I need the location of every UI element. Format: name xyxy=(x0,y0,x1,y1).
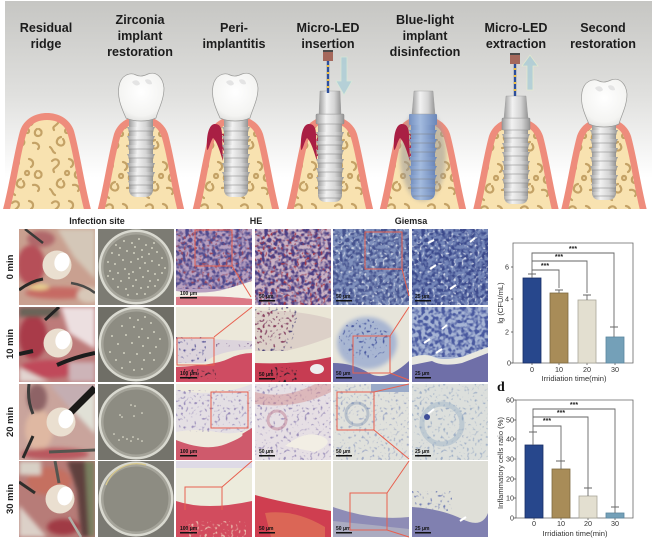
significance stars: *** xyxy=(569,246,577,253)
bar chart: inflammatory cells ratio xyxy=(496,396,633,538)
photo: 30 min culture plate xyxy=(98,461,174,537)
micrograph: Giemsa 0 min magnified: 25 μm xyxy=(415,294,430,300)
photo: 20 min infection site xyxy=(19,384,95,460)
micrograph: HE 0 min overview: 100 μm xyxy=(180,291,198,297)
significance stars: *** xyxy=(557,410,565,417)
bar chart: colony counts xyxy=(496,243,633,383)
significance stars: *** xyxy=(555,254,563,261)
micrograph: Giemsa 10 min magnified xyxy=(412,307,488,382)
step labels: implant xyxy=(118,29,163,43)
significance stars xyxy=(541,246,577,270)
step: zirconia implant restoration xyxy=(96,73,186,216)
micrograph: HE 20 min magnified xyxy=(255,384,331,460)
micrograph: Giemsa 0 min magnified xyxy=(412,229,488,305)
micrograph: Giemsa 10 min overview xyxy=(333,307,409,382)
tick labels: 30 xyxy=(611,519,619,528)
micrograph: Giemsa 10 min overview: 50 μm xyxy=(336,371,351,377)
step labels: disinfection xyxy=(390,45,460,59)
row labels: 0 min xyxy=(5,254,16,279)
photo: 0 min culture plate xyxy=(98,229,174,305)
tick labels: 0 xyxy=(507,358,511,368)
step labels: insertion xyxy=(301,37,355,51)
step labels: implantitis xyxy=(203,37,265,51)
tick labels: 30 xyxy=(611,365,619,374)
photo: 30 min infection site xyxy=(19,461,95,537)
step labels: implant xyxy=(403,29,448,43)
step: micro-LED insertion xyxy=(285,50,375,216)
step labels xyxy=(20,13,636,59)
micrograph: Giemsa 30 min overview xyxy=(333,461,409,537)
tick labels: 40 xyxy=(506,434,514,444)
step labels: Second xyxy=(580,21,626,35)
micrograph: Giemsa 10 min magnified: 25 μm xyxy=(415,371,430,377)
tick labels: 50 xyxy=(506,416,514,424)
magnification boxes and connector lines xyxy=(177,230,409,537)
y axis title: Inflammatory cells ratio (%) xyxy=(496,417,505,509)
micrograph: HE 30 min overview xyxy=(176,461,252,537)
tick labels: 10 xyxy=(557,519,565,528)
micrograph: Giemsa 20 min magnified xyxy=(412,384,488,460)
step: micro-LED extraction xyxy=(471,53,561,218)
tick labels: 30 xyxy=(506,454,514,464)
tick labels: 60 xyxy=(506,396,514,404)
micrograph: Giemsa 30 min magnified: 25 μm xyxy=(415,526,430,532)
tick labels xyxy=(505,262,619,374)
tick labels: 6 xyxy=(505,262,509,272)
arrow: extraction up xyxy=(522,55,538,90)
significance stars: *** xyxy=(541,263,549,270)
micrograph: HE 20 min overview xyxy=(176,384,252,460)
micrograph: HE 0 min overview xyxy=(176,229,252,305)
micrograph: HE 30 min magnified xyxy=(255,461,331,537)
step labels: ridge xyxy=(31,37,61,51)
micrograph: Giemsa 0 min overview xyxy=(333,229,409,305)
step labels: Peri- xyxy=(220,21,248,35)
photo: 20 min culture plate xyxy=(98,384,174,460)
arrow: insertion down xyxy=(336,57,352,95)
y axis title: lg (CFU/mL) xyxy=(496,282,505,324)
tick labels: 10 xyxy=(555,365,563,374)
micrograph: HE 20 min overview: 100 μm xyxy=(180,449,198,455)
column heading: infection site: Infection site xyxy=(69,216,125,226)
step: peri-implantitis xyxy=(191,73,281,216)
x axis title: Irridiation time(min) xyxy=(543,529,608,538)
panel letter d: d xyxy=(497,380,505,395)
row labels: 10 min xyxy=(5,329,16,359)
tick labels: 20 xyxy=(506,474,514,484)
significance stars: *** xyxy=(570,402,578,409)
tick labels: 0 xyxy=(510,514,514,522)
step: blue-light implant disinfection xyxy=(378,91,468,216)
bars xyxy=(525,445,624,518)
bars xyxy=(523,278,624,363)
micrograph: Giemsa 20 min magnified: 25 μm xyxy=(415,449,430,455)
micrograph: Giemsa 20 min overview xyxy=(333,384,409,460)
step labels: extraction xyxy=(486,37,546,51)
micrograph: Giemsa 0 min overview: 50 μm xyxy=(336,294,351,300)
panel: implant treatment schematic xyxy=(0,1,652,219)
tick labels: 20 xyxy=(584,519,592,528)
tick labels: 0 xyxy=(532,519,536,528)
tick labels: 4 xyxy=(505,294,509,304)
micrograph: HE 10 min overview xyxy=(176,307,252,382)
micrograph: HE 0 min magnified: 50 μm xyxy=(259,294,274,300)
step labels: Micro-LED xyxy=(297,21,359,35)
column heading: Giemsa: Giemsa xyxy=(395,216,428,226)
tick labels xyxy=(506,396,619,528)
column heading: HE: HE xyxy=(250,216,262,226)
x axis title: Irridiation time(min) xyxy=(542,374,607,383)
significance stars xyxy=(543,402,578,425)
error bars and brackets xyxy=(528,253,618,337)
step labels: Micro-LED xyxy=(485,21,547,35)
tick labels: 10 xyxy=(506,494,514,502)
micrograph: HE 10 min overview: 100 μm xyxy=(180,371,198,377)
error bars and brackets xyxy=(529,409,619,513)
significance stars: *** xyxy=(543,418,551,425)
micrograph: HE 0 min magnified xyxy=(255,229,331,305)
micrograph: HE 30 min magnified: 50 μm xyxy=(259,526,274,532)
photo: 10 min culture plate xyxy=(98,307,174,382)
step labels: Residual xyxy=(20,21,72,35)
tick labels: 0 xyxy=(530,365,534,374)
micrograph: Giemsa 20 min overview: 50 μm xyxy=(336,449,351,455)
row labels: 20 min xyxy=(5,407,16,437)
photo: 10 min infection site xyxy=(19,307,95,382)
step: second restoration xyxy=(559,79,649,218)
step labels: Zirconia xyxy=(116,13,165,27)
step labels: restoration xyxy=(570,37,636,51)
micrograph: HE 10 min magnified xyxy=(255,307,331,382)
micrograph: HE 20 min magnified: 50 μm xyxy=(259,449,274,455)
step labels: Blue-light xyxy=(396,13,455,27)
photo: 0 min infection site xyxy=(19,229,95,305)
step: residual ridge xyxy=(2,113,92,213)
micrograph: HE 30 min overview: 100 μm xyxy=(180,526,198,532)
micrograph: Giemsa 30 min overview: 50 μm xyxy=(336,526,351,532)
row labels: 30 min xyxy=(5,484,16,514)
row labels xyxy=(5,254,16,514)
tick labels: 2 xyxy=(505,328,509,336)
micrograph: HE 10 min magnified: 50 μm xyxy=(259,372,274,378)
tick labels: 20 xyxy=(583,365,591,374)
micrograph: Giemsa 30 min magnified xyxy=(412,461,488,537)
step labels: restoration xyxy=(107,45,173,59)
